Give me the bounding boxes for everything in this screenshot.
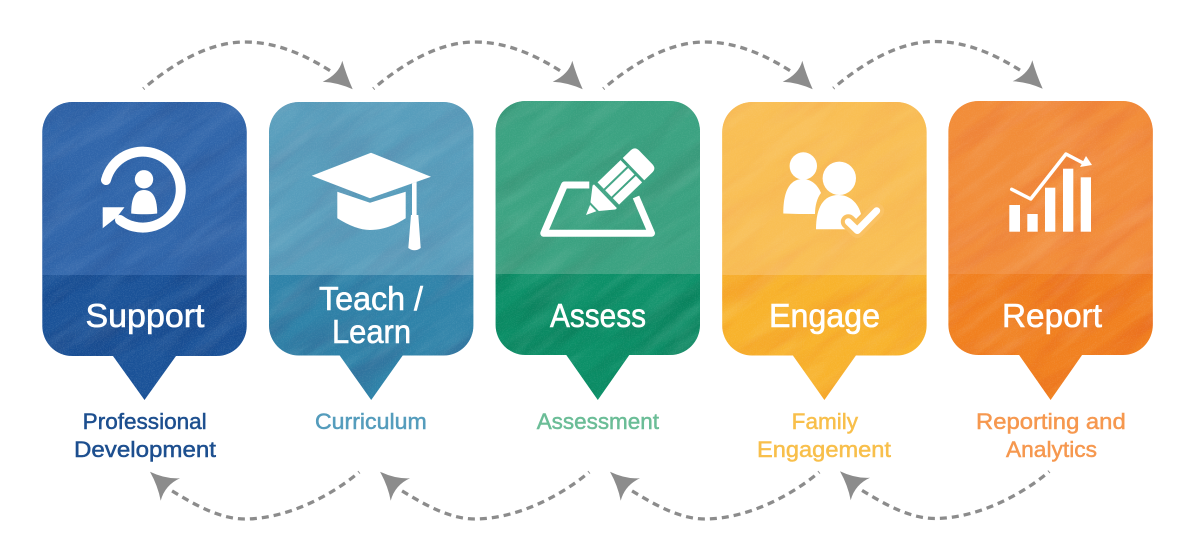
- caption: Family Engagement: [757, 409, 892, 462]
- label: Engage: Engage: [769, 297, 880, 334]
- caption: Reporting and Analytics: Reporting and: [976, 409, 1126, 434]
- arrow: Teach / Learn back to Support: [150, 472, 359, 519]
- label: Support: Support: [86, 297, 204, 334]
- caption: Professional Development: Development: [74, 437, 217, 462]
- icon: pencil on tablet: [544, 145, 657, 233]
- label: Teach / Learn: [319, 280, 424, 350]
- icon: two people with check mark: [783, 152, 877, 230]
- caption: Assessment: Assessment: [537, 409, 660, 434]
- arrow: Assess to Engage: [603, 42, 813, 89]
- arrow: Assess back to Teach / Learn: [380, 472, 589, 519]
- arrow: Engage back to Assess: [610, 472, 819, 519]
- arrow: Support to Teach / Learn: [143, 42, 353, 89]
- panel: Engage: [722, 102, 927, 400]
- label: Teach / Learn: Teach /: [319, 280, 424, 317]
- arrow: Teach / Learn to Assess: [373, 42, 583, 89]
- arrow: Engage to Report: [833, 42, 1043, 89]
- caption: Family Engagement: Family: [792, 409, 859, 434]
- icon: bar chart with trend line: [1009, 154, 1092, 232]
- caption: Reporting and Analytics: Analytics: [1006, 437, 1097, 462]
- panel: Report: [948, 101, 1153, 400]
- label: Assess: Assess: [550, 297, 646, 334]
- caption: Family Engagement: Engagement: [757, 437, 892, 462]
- caption: Professional Development: Professional: [83, 409, 207, 434]
- panel: Assess: [496, 101, 700, 400]
- caption: Curriculum: Curriculum: [315, 409, 427, 434]
- panel: Support: [42, 102, 247, 400]
- caption: Reporting and Analytics: [976, 409, 1126, 462]
- icon: circular arrow with person: [103, 152, 181, 228]
- label: Report: Report: [1002, 297, 1102, 334]
- arrows: top row, moving forward: [143, 42, 1043, 89]
- arrows: bottom row, moving backward: [150, 471, 1049, 519]
- caption: Professional Development: [74, 409, 217, 462]
- label: Teach / Learn: Learn: [332, 313, 411, 350]
- panel: Teach / Learn: [269, 102, 474, 400]
- arrow: Report back to Engage: [840, 471, 1049, 518]
- icon: graduation cap: [312, 153, 431, 250]
